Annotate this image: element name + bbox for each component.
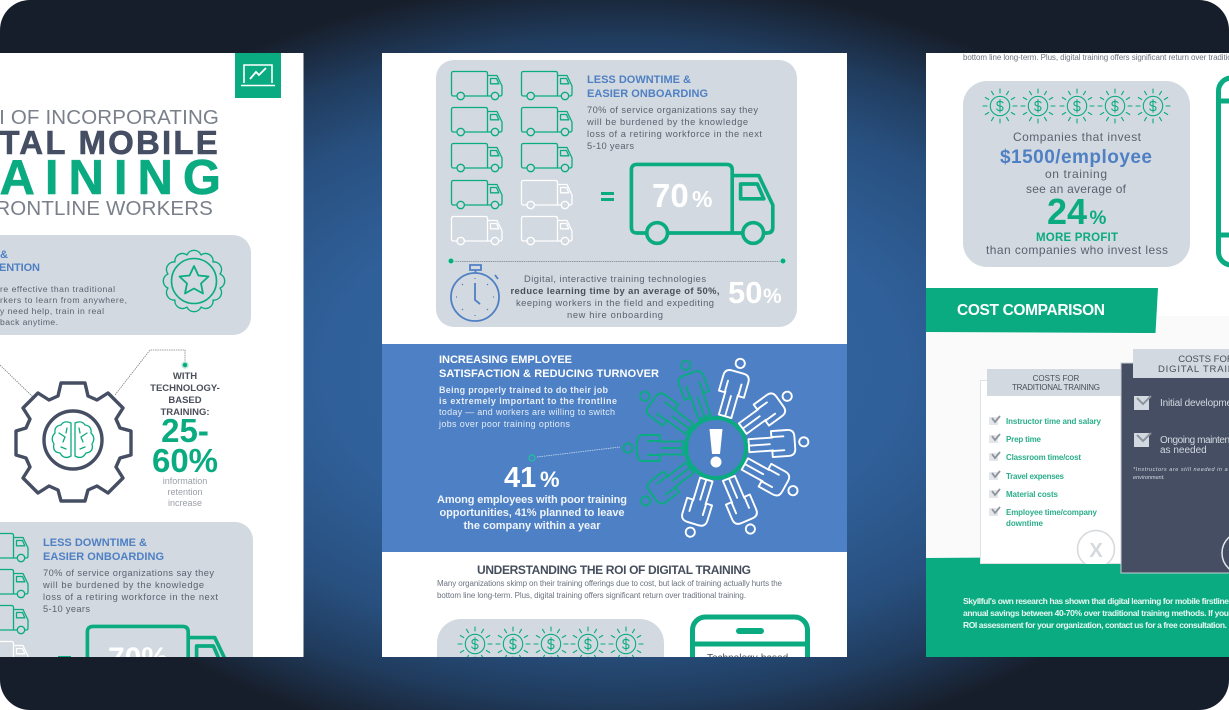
panel: less downtime card (left copy): 70% of service organizations say they bbox=[43, 568, 214, 578]
text block: intro bbox=[437, 579, 783, 600]
green footer: annual savings between 40-70% over traditional training methods. If you bbox=[963, 608, 1229, 618]
heading bbox=[439, 356, 659, 377]
stat: 50%: 50 bbox=[728, 275, 762, 310]
heading: LESS DOWNTIME & bbox=[587, 74, 691, 86]
icon: stopwatch bbox=[451, 265, 499, 321]
text block: 70% of service organizations say they bbox=[587, 105, 758, 115]
icon: circle of people with alert bbox=[623, 355, 809, 540]
panel: digital costs card bbox=[1121, 349, 1229, 574]
panel: retention card: rkers to learn from anywhere, bbox=[0, 295, 127, 305]
panel: left infographic page bbox=[0, 53, 304, 710]
panel: invest card top bbox=[437, 619, 664, 657]
green footer: Skyllful's own research has shown that digital learning for mobile firstline bbox=[963, 596, 1229, 606]
icon: laptop chart badge bbox=[235, 53, 281, 98]
panel: traditional costs card: Instructor time and salary bbox=[1006, 417, 1102, 426]
panel: invest card: $1500/employee bbox=[1000, 147, 1152, 168]
panel: retention card: back anytime. bbox=[0, 317, 58, 327]
text block: intro: bottom line long-term. Plus, digital training offers significant return over traditional training. bbox=[437, 591, 746, 600]
heading: understanding the ROI: UNDERSTANDING THE ROI OF DIGITAL TRAINING bbox=[477, 563, 751, 577]
stat: retention increase: BASED bbox=[168, 395, 202, 406]
equals sign bbox=[601, 194, 614, 200]
text block: reduce learning time: new hire onboarding bbox=[567, 309, 663, 320]
stat: retention increase: TECHNOLOGY- bbox=[150, 383, 220, 394]
lower background bbox=[926, 316, 1229, 561]
panel: invest card bbox=[963, 81, 1190, 267]
stat: 41%: 41 bbox=[504, 462, 536, 494]
stat: retention increase: 25- bbox=[161, 412, 209, 449]
icon: phone bbox=[1216, 78, 1229, 265]
panel: invest card: on training bbox=[1045, 167, 1107, 181]
stat: retention increase: TRAINING: bbox=[160, 407, 210, 418]
panel: less downtime card (left copy) bbox=[0, 522, 253, 657]
stat: 41% bbox=[504, 467, 559, 487]
text block: reduce learning time: Digital, interactive training technologies bbox=[524, 273, 706, 284]
heading: INCREASING EMPLOYEE bbox=[439, 354, 572, 366]
panel: traditional costs card: Classroom time/cost bbox=[1006, 453, 1081, 462]
text block: jobs over poor training options bbox=[438, 419, 570, 429]
heading bbox=[588, 76, 708, 97]
panel: less downtime card (left copy): EASIER ONBOARDING bbox=[43, 551, 164, 563]
divider with dots bbox=[454, 261, 780, 262]
stat: retention increase: increase bbox=[168, 498, 202, 508]
text block: intro: Many organizations skimp on their training offerings due to cost, but lack of training actually hurts the bbox=[437, 579, 783, 588]
icon: large truck 70%: % bbox=[692, 186, 712, 212]
panel: right infographic page bbox=[926, 53, 1229, 657]
panel: less downtime card (left copy): LESS DOWNTIME & bbox=[43, 537, 147, 549]
text block: 5-10 years bbox=[587, 141, 634, 151]
text block bbox=[586, 105, 762, 151]
panel: traditional costs card: Material costs bbox=[1006, 490, 1059, 499]
text block: among employees: the company within a year bbox=[464, 520, 601, 532]
panel: invest card: than companies who invest less bbox=[986, 243, 1168, 257]
text block: reduce learning time: keeping workers in the field and expediting bbox=[516, 297, 714, 308]
panel: less downtime card bbox=[436, 60, 797, 327]
text block: among employees: Among employees with poor training bbox=[437, 494, 627, 506]
text block: reduce learning time bbox=[510, 273, 720, 320]
stat: 50%: % bbox=[763, 285, 782, 308]
panel: traditional costs card: Prep time bbox=[1006, 435, 1042, 444]
text block: is extremely important to the frontline bbox=[439, 396, 617, 406]
text block: loss of a retiring workforce in the next bbox=[587, 129, 762, 139]
stat: retention increase: WITH bbox=[173, 371, 197, 382]
heading: EASIER ONBOARDING bbox=[587, 88, 708, 100]
icon: large truck 70% bbox=[631, 164, 773, 243]
panel: less downtime card (left copy): loss of a retiring workforce in the next bbox=[43, 592, 218, 602]
stat: retention increase: 60% bbox=[152, 442, 218, 479]
title bbox=[0, 110, 218, 215]
panel: traditional costs card: TRADITIONAL TRAINING bbox=[1012, 383, 1100, 392]
panel: digital costs card: environment. bbox=[1133, 475, 1165, 481]
panel: retention card: re effective than traditional bbox=[0, 284, 115, 294]
cost comparison ribbon bbox=[926, 288, 1158, 333]
cost comparison ribbon: COST COMPARISON bbox=[957, 302, 1105, 319]
icon group: truck grid bbox=[452, 72, 572, 245]
panel: digital costs card: as needed bbox=[1160, 445, 1207, 456]
callout line bbox=[537, 447, 620, 457]
heading: SATISFACTION & REDUCING TURNOVER bbox=[439, 368, 659, 380]
callout lines bbox=[0, 350, 185, 397]
icon: phone top bbox=[690, 614, 810, 657]
text block: Being properly trained to do their job bbox=[439, 385, 608, 395]
panel: traditional costs card: X bbox=[1089, 540, 1103, 562]
panel: less downtime card (left copy): will be burdened by the knowledge bbox=[42, 580, 204, 590]
icon: star badge bbox=[163, 250, 225, 312]
green footer: ROI assessment for your organization, contact us for a free consultation. bbox=[963, 620, 1227, 630]
panel: center infographic page bbox=[382, 53, 847, 699]
stat: retention increase bbox=[150, 371, 220, 508]
text block: today — and workers are willing to switch bbox=[439, 407, 615, 417]
stat: 41%: % bbox=[540, 467, 560, 492]
panel: traditional costs card: Travel expenses bbox=[1006, 472, 1065, 481]
panel: less downtime card (left copy): 5-10 years bbox=[43, 604, 90, 614]
icon: gear with brain bbox=[16, 383, 131, 501]
panel: retention card: ENTION bbox=[0, 262, 40, 274]
text block: among employees bbox=[437, 494, 627, 532]
panel: retention card bbox=[0, 235, 251, 335]
panel: traditional costs card: COSTS FOR bbox=[1033, 374, 1080, 383]
panel: traditional costs card: Employee time/company bbox=[1006, 508, 1098, 517]
panel: traditional costs card bbox=[980, 369, 1126, 570]
panel: traditional costs card: downtime bbox=[1006, 519, 1044, 528]
panel: invest card: MORE PROFIT bbox=[1036, 232, 1118, 244]
panel: employee satisfaction band bbox=[382, 344, 847, 552]
text block: will be burdened by the knowledge bbox=[586, 117, 748, 127]
green footer bbox=[926, 556, 1229, 657]
stat: 50% bbox=[729, 282, 782, 304]
icon: phone top: Technology-based bbox=[707, 653, 788, 664]
panel: invest card: % bbox=[1090, 208, 1107, 229]
panel: less downtime card (left copy): 70% bbox=[108, 642, 168, 675]
text block: among employees: opportunities, 41% planned to leave bbox=[440, 507, 624, 519]
panel: retention card: y need help, train in real bbox=[0, 306, 104, 316]
panel: retention card: & bbox=[0, 249, 8, 261]
stat: retention increase: information bbox=[163, 476, 207, 486]
text block bbox=[438, 385, 617, 429]
panel: invest card: see an average of bbox=[1026, 182, 1127, 196]
icon: large truck 70%: 70 bbox=[652, 177, 689, 214]
text block: reduce learning time: reduce learning time by an average of 50%, bbox=[510, 285, 720, 296]
panel: invest card: Companies that invest bbox=[1013, 130, 1142, 144]
stat: retention increase: retention bbox=[167, 487, 203, 497]
panel: invest card: 24 bbox=[1047, 191, 1087, 232]
